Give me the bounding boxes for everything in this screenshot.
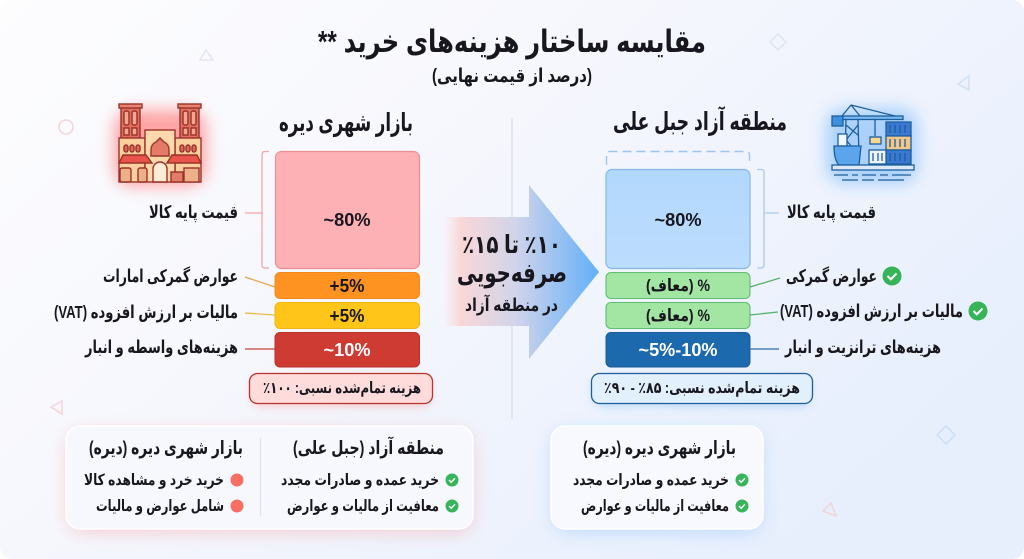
- leader: [245, 348, 275, 350]
- bar: middleman 10%: ~10%: [324, 340, 370, 360]
- leader: [750, 348, 779, 350]
- bar: VAT exempt: [606, 302, 750, 328]
- bar: base price 80%: [606, 170, 750, 268]
- bar: base price 80%: [276, 152, 420, 268]
- label: base price: قیمت پایه کالا: [149, 202, 238, 223]
- row: includes taxes: شامل عوارض و مالیات: [96, 498, 224, 515]
- bar: customs +5%: +5%: [330, 276, 364, 296]
- label: middleman costs: هزینه‌های واسطه و انبار: [84, 337, 238, 358]
- heading: Deira souk: بازار شهری دیره: [279, 109, 413, 138]
- leader: [750, 278, 780, 287]
- bar: base price 80%: ~80%: [324, 210, 370, 230]
- icon: souk building: [114, 104, 206, 186]
- dashed removed-cost outline: [606, 152, 750, 165]
- text: 10 to 15 percent: ٪۱۰ تا ۱۵٪: [462, 231, 561, 259]
- label: VAT: مالیات بر ارزش افزوده (VAT): [54, 302, 238, 323]
- row: wholesale: خرید عمده و صادرات مجدد: [573, 472, 729, 489]
- leader: [750, 312, 778, 315]
- text: in free zone: در منطقه آزاد: [465, 293, 558, 315]
- total cost box: [592, 374, 812, 406]
- label: base price: قیمت پایه کالا: [787, 202, 876, 223]
- card: city souk benefits: بازار شهری دیره (دیره): [583, 437, 736, 459]
- label: UAE customs: عوارض گمرکی امارات: [103, 266, 238, 287]
- bar: middleman 10%: [275, 332, 420, 367]
- row: retail: خرید خرد و مشاهده کالا: [84, 472, 224, 489]
- label: VAT with check: مالیات بر ارزش افزوده (VAT): [780, 301, 963, 322]
- text: savings: صرفه‌جویی: [457, 258, 567, 289]
- label: customs with check: عوارض گمرکی: [786, 266, 877, 287]
- panel: Jebel Ali free zone: [592, 105, 988, 406]
- total cost box: [250, 374, 432, 406]
- row: tax exempt: معافیت از مالیات و عوارض: [581, 498, 729, 515]
- bar: VAT +5%: [275, 302, 420, 328]
- title: مقایسه ساختار هزینه‌های خرید **: [318, 24, 706, 60]
- card: city souk benefits: [551, 426, 763, 532]
- center divider: [511, 118, 513, 419]
- bar: base price 80%: ~80%: [654, 210, 702, 230]
- bracket and leader: [245, 152, 269, 268]
- column: free zone: [281, 436, 458, 515]
- label: transit costs: هزینه‌های ترانزیت و انبار: [784, 337, 941, 358]
- icon: port with crane and containers: [826, 105, 918, 184]
- decorative shapes: [51, 34, 969, 516]
- bracket and leader: [757, 170, 779, 268]
- total cost box: هزینه تمام‌شده نسبی: ۸۵٪ - ۹۰٪: [604, 380, 800, 397]
- leader: [245, 313, 275, 315]
- leader: [245, 277, 275, 287]
- column: city souk: [84, 437, 244, 515]
- bar: transit 5-10%: [606, 332, 750, 367]
- panel: Deira souk: [54, 104, 432, 406]
- bar: VAT +5%: +5%: [330, 306, 364, 326]
- icon: check: [968, 302, 988, 320]
- column: free zone: منطقه آزاد (جبل علی): [293, 436, 444, 459]
- icon: check: [882, 266, 902, 286]
- bar: customs exempt: [606, 272, 750, 298]
- bar: VAT exempt: % (معاف): [646, 306, 710, 325]
- row: tax exempt: معافیت از مالیات و عوارض: [287, 498, 439, 515]
- card: comparison summary: [66, 426, 473, 532]
- central arrow: savings: [445, 185, 599, 359]
- total cost box: هزینه تمام‌شده نسبی: ۱۰۰٪: [263, 380, 421, 397]
- heading: Jebel Ali: منطقه آزاد جبل علی: [613, 106, 787, 136]
- bar: transit 5-10%: ~5%-10%: [638, 340, 718, 360]
- column: city souk: بازار شهری دیره (دیره): [89, 437, 243, 459]
- row: wholesale: خرید عمده و صادرات مجدد: [281, 472, 439, 489]
- bar: customs exempt: % (معاف): [646, 276, 710, 295]
- bar: customs +5%: [275, 272, 420, 298]
- subtitle: (درصد از قیمت نهایی): [432, 66, 592, 87]
